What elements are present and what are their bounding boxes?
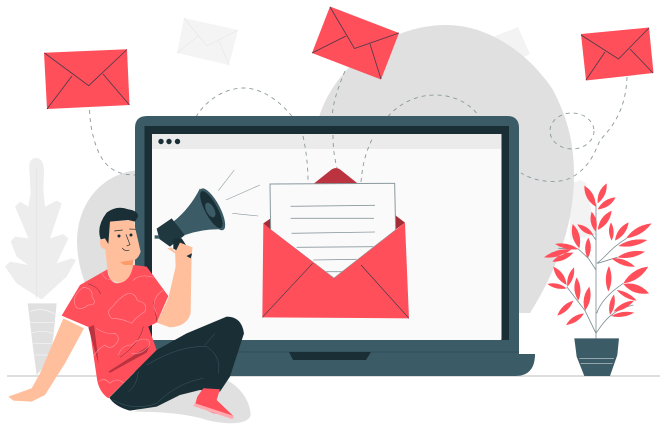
laptop — [135, 116, 535, 376]
face details — [114, 229, 136, 251]
letter paper — [270, 183, 396, 278]
ground line — [7, 375, 660, 377]
flying envelope: right — [581, 28, 654, 80]
dashed flight paths — [90, 71, 627, 181]
faded envelope — [177, 18, 238, 65]
shoe — [195, 388, 234, 417]
hair — [99, 208, 138, 244]
person group — [5, 158, 260, 423]
background blob: left — [77, 170, 140, 310]
potted plant: red leaves — [544, 183, 652, 376]
megaphone — [155, 185, 230, 258]
right arm — [157, 250, 192, 327]
browser bar — [152, 134, 502, 149]
plant stems — [558, 203, 633, 338]
t-shirt — [62, 265, 168, 398]
faded plant — [5, 158, 76, 375]
faded pot — [28, 303, 57, 375]
faded envelope behind blob — [480, 27, 530, 70]
laptop screen — [152, 134, 502, 340]
shirt pattern — [74, 273, 163, 383]
envelope front — [262, 223, 409, 318]
neck and head — [100, 220, 141, 285]
plant pot — [574, 338, 619, 376]
background blob: large — [319, 25, 574, 313]
browser dots — [158, 139, 180, 144]
hand — [167, 243, 193, 256]
floor shadow — [133, 380, 251, 423]
flying envelope: left — [44, 49, 130, 109]
faded plant shape — [570, 180, 596, 240]
dashed paths on screen — [303, 135, 373, 182]
neck shadow — [120, 260, 133, 265]
flying envelope: top — [312, 6, 399, 80]
shirt folds — [88, 325, 150, 373]
main envelope — [262, 168, 409, 318]
pants — [109, 317, 244, 411]
laptop notch — [289, 352, 371, 360]
sound lines — [218, 170, 260, 216]
left arm — [8, 318, 84, 402]
